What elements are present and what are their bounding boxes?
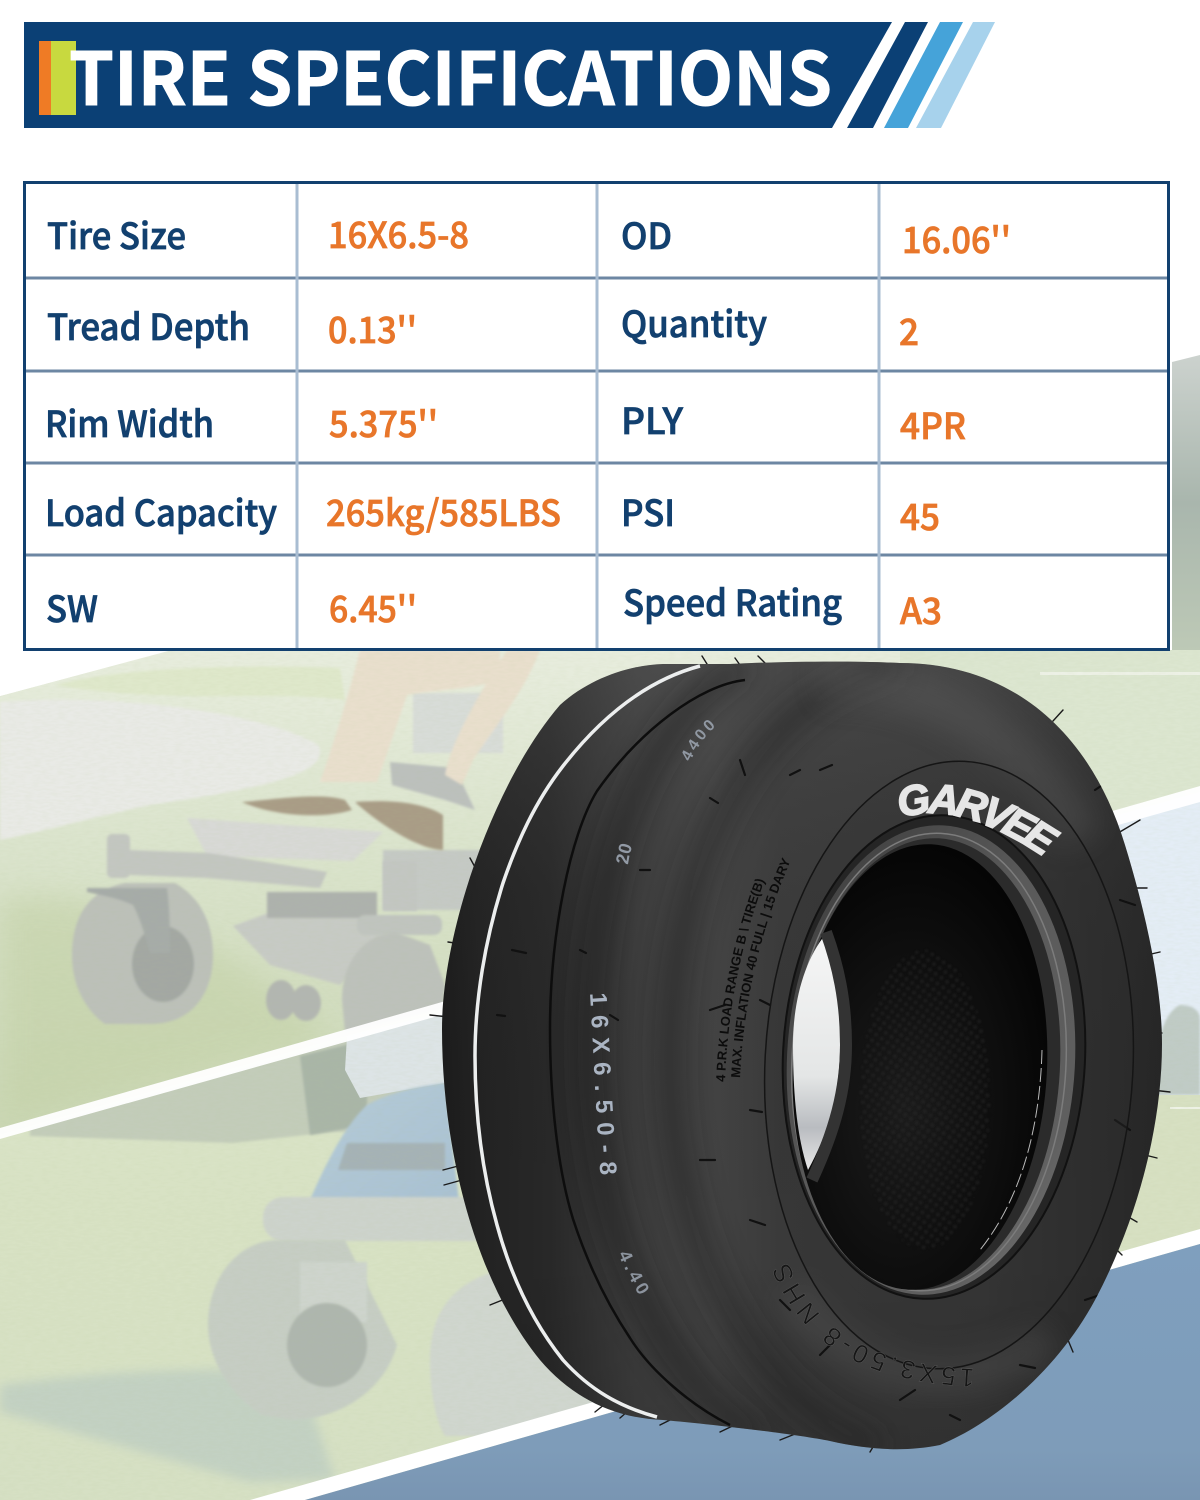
tire illustration xyxy=(429,655,1171,1453)
seated rider legs xyxy=(320,650,540,785)
seat and lever behind legs xyxy=(383,693,503,910)
row: SW and speed rating: Speed Rating xyxy=(623,575,842,627)
tread size markings: 4.40 xyxy=(620,1252,648,1294)
right side yard xyxy=(1172,355,1200,650)
row: rim width and ply xyxy=(45,393,966,450)
shadow on lawn xyxy=(0,1370,335,1482)
row: rim width and ply: 5.375'' xyxy=(329,396,438,448)
inner tire hole xyxy=(792,844,1048,1290)
distant trees and windshield xyxy=(30,1042,444,1144)
row: rim width and ply: PLY xyxy=(621,393,683,445)
tire body xyxy=(442,662,1162,1449)
banner stripes xyxy=(847,22,995,128)
row: tire size and OD: 16.06'' xyxy=(902,212,1011,264)
dark side groove xyxy=(550,680,745,1425)
tread size markings xyxy=(590,720,714,1294)
row: tread depth and quantity: Tread Depth xyxy=(47,299,250,351)
grass texture xyxy=(0,650,1200,1500)
rider boots xyxy=(242,797,443,850)
background photo collage xyxy=(0,355,1200,1500)
brand logo GARVEE: GARVEE xyxy=(898,784,1062,856)
tire whiskers xyxy=(430,656,1170,1452)
upper white divider band xyxy=(0,786,1200,1139)
row: SW and speed rating: A3 xyxy=(900,583,942,635)
blue floor panel xyxy=(250,1229,1200,1500)
specification table xyxy=(24,182,1169,650)
row: tread depth and quantity: 0.13'' xyxy=(328,302,417,354)
tread size markings: 4400 xyxy=(682,720,714,760)
blue mower hood xyxy=(310,1083,460,1210)
tread size markings: 20 xyxy=(616,844,632,864)
row: SW and speed rating xyxy=(46,575,942,635)
row: load capacity and PSI: 265kg/585LBS xyxy=(326,485,561,537)
row: load capacity and PSI: 45 xyxy=(900,489,940,541)
tread size markings: 16X6.50-8 xyxy=(590,994,617,1174)
rear wheel xyxy=(342,932,445,1032)
row: tire size and OD: Tire Size xyxy=(47,208,186,260)
sidewall groove ring xyxy=(749,752,1149,1378)
row: load capacity and PSI: PSI xyxy=(621,485,675,537)
title text: TIRE SPECIFICATIONS xyxy=(69,21,832,127)
row: tire size and OD: OD xyxy=(621,208,672,260)
row: tread depth and quantity: Quantity xyxy=(621,296,767,348)
white bead line xyxy=(475,666,700,1417)
sidewall load text: MAX. INFLATION 40 FULL | 15 DARY xyxy=(731,858,790,1078)
row: tread depth and quantity: 2 xyxy=(899,304,919,356)
title banner xyxy=(24,21,995,128)
row: load capacity and PSI xyxy=(45,485,940,541)
caster wheel xyxy=(72,883,213,1024)
row: SW and speed rating: 6.45'' xyxy=(329,581,417,633)
sidewall size text: 15X3.50-8 NHS xyxy=(774,1264,973,1387)
row: rim width and ply: 4PR xyxy=(900,398,966,450)
mower bumper xyxy=(263,1197,493,1241)
row: rim width and ply: Rim Width xyxy=(45,396,214,448)
lower mower wheel xyxy=(208,1240,397,1420)
sidewall load text: 4 P.R.K LOAD RANGE B \ TIRE(B) xyxy=(716,879,766,1082)
row: load capacity and PSI: Load Capacity xyxy=(45,485,277,537)
tread nubs xyxy=(497,690,1135,1420)
row: tire size and OD: 16X6.5-8 xyxy=(328,207,469,259)
row: SW and speed rating: SW xyxy=(46,581,98,633)
row: tire size and OD xyxy=(47,207,1011,264)
tire shading xyxy=(496,662,1136,1450)
row: tread depth and quantity xyxy=(47,296,919,356)
mower deck and frame xyxy=(107,818,442,1021)
see-through opening xyxy=(793,935,840,1170)
accent bars xyxy=(39,41,76,115)
second lower wheel xyxy=(430,1273,610,1436)
upper lawn panel xyxy=(0,355,1200,1135)
top white corner xyxy=(0,650,172,696)
right side sky and tree xyxy=(1100,792,1200,1100)
rim ring xyxy=(771,807,1097,1307)
lower lawn panel xyxy=(0,792,1200,1500)
banner background xyxy=(24,22,892,128)
